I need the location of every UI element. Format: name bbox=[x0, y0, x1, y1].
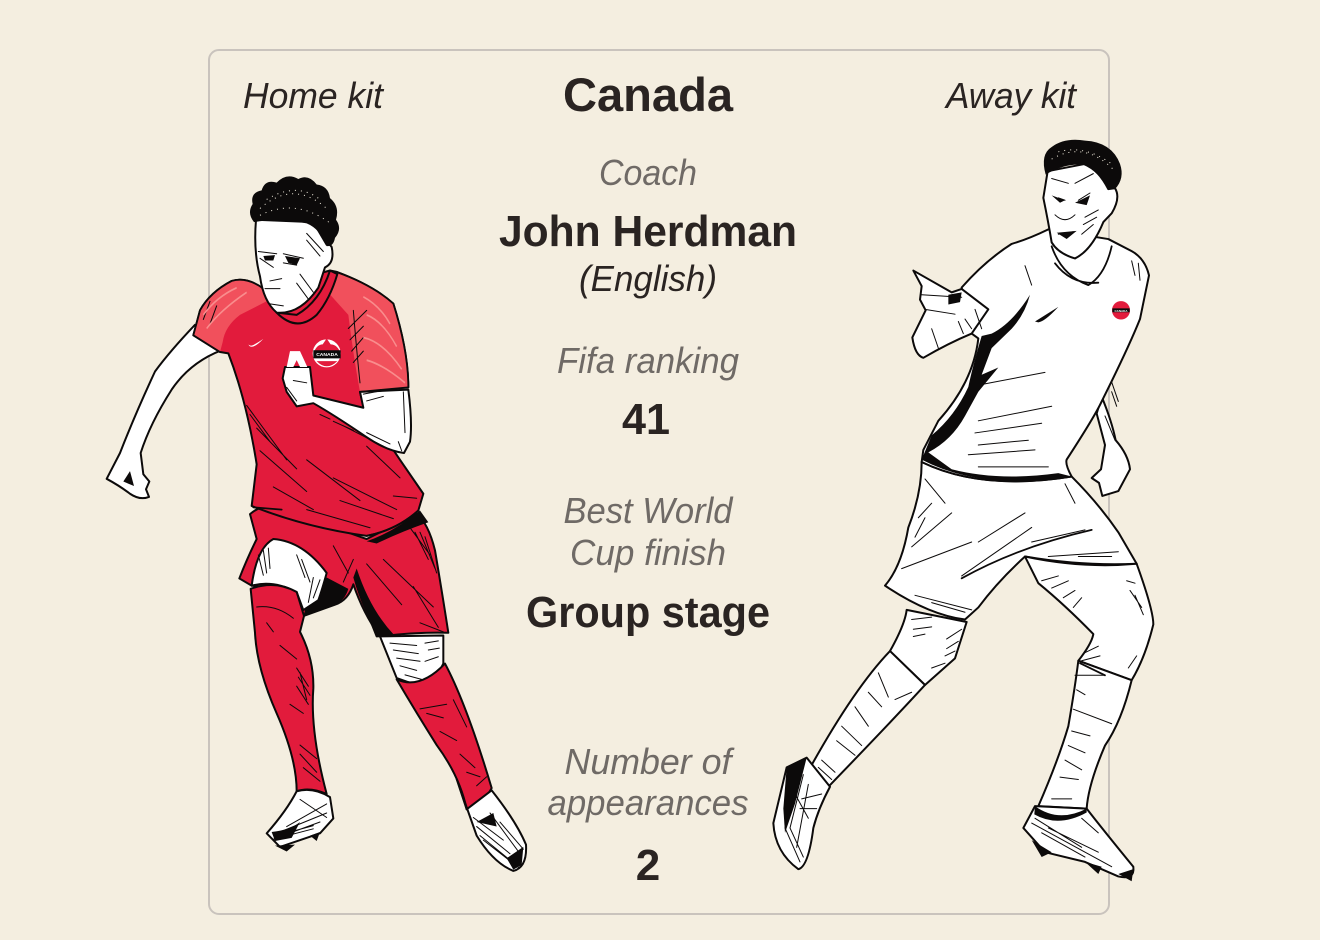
collar bbox=[277, 271, 337, 323]
head and face bbox=[255, 220, 332, 313]
left boot bbox=[267, 790, 333, 847]
stat: number of appearances: appearances bbox=[548, 782, 748, 823]
shirt bbox=[193, 271, 428, 544]
label: home kit: Home kit bbox=[243, 75, 385, 116]
hair bbox=[1044, 140, 1122, 189]
shorts bbox=[239, 506, 448, 636]
player: home kit in red bbox=[107, 176, 526, 871]
crest bbox=[313, 338, 341, 367]
left boot bbox=[773, 758, 830, 869]
shorts bbox=[885, 462, 1137, 620]
stat: coach: (English) bbox=[579, 258, 717, 299]
nike swoosh bbox=[248, 339, 263, 347]
stat: number of appearances: 2 bbox=[636, 841, 660, 890]
label: away kit: Away kit bbox=[944, 75, 1078, 116]
stat: best world cup finish: Cup finish bbox=[570, 532, 726, 573]
left sock bbox=[251, 585, 327, 794]
stat: coach: Coach bbox=[599, 152, 697, 193]
title: Canada bbox=[563, 68, 734, 121]
shirt bbox=[922, 229, 1149, 481]
stat: fifa ranking: Fifa ranking bbox=[557, 340, 739, 381]
stat: fifa ranking bbox=[557, 340, 739, 444]
stat: number of appearances: Number of bbox=[564, 741, 735, 782]
player: away kit in white bbox=[773, 140, 1153, 881]
right thigh bbox=[1025, 557, 1153, 680]
hair bbox=[250, 176, 339, 246]
right sock bbox=[1038, 661, 1132, 809]
stat: number of appearances bbox=[548, 741, 748, 890]
right boot bbox=[1023, 806, 1133, 877]
crest: CANADA bbox=[316, 352, 338, 358]
right boot bbox=[457, 779, 526, 871]
head and face bbox=[1043, 164, 1117, 258]
left thigh bbox=[252, 539, 327, 610]
left sock bbox=[812, 651, 925, 787]
right thigh bbox=[380, 635, 443, 684]
crest bbox=[1112, 301, 1130, 320]
pointing arm and hand bbox=[912, 271, 988, 358]
right sock bbox=[397, 664, 492, 809]
right forearm and fist bbox=[283, 367, 411, 453]
white shirt number bbox=[287, 351, 307, 367]
stat: coach: John Herdman bbox=[499, 207, 797, 256]
left thigh bbox=[890, 610, 967, 685]
stat: best world cup finish: Group stage bbox=[526, 588, 770, 637]
left arm bbox=[107, 325, 222, 498]
crest: CANADA bbox=[1114, 309, 1128, 313]
stat: best world cup finish bbox=[526, 490, 770, 637]
stat: best world cup finish: Best World bbox=[564, 490, 733, 531]
back arm and hand bbox=[1092, 397, 1130, 496]
panel: card outline bbox=[209, 50, 1109, 914]
black thumb mark bbox=[123, 471, 134, 486]
stat: fifa ranking: 41 bbox=[622, 395, 670, 444]
stat: coach bbox=[499, 152, 797, 299]
